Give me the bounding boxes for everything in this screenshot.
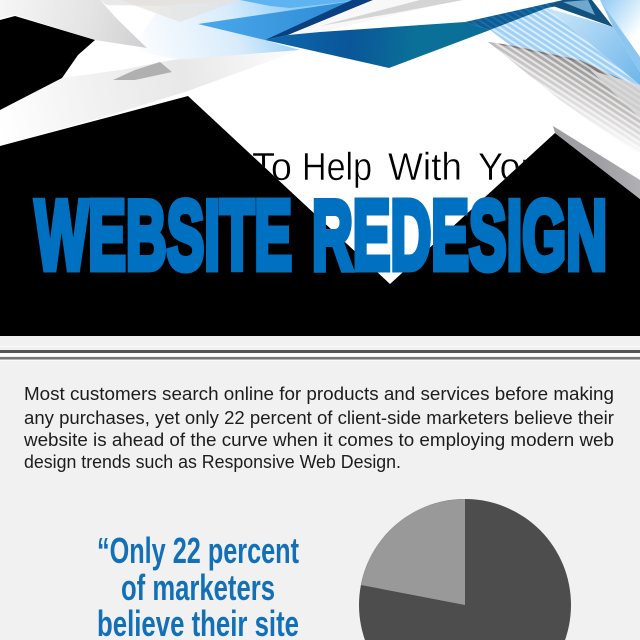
intro paragraph: Most customers search online for products and services before making (24, 383, 614, 404)
gray strip (553, 126, 640, 199)
body panel (0, 336, 640, 640)
black upper field (0, 16, 95, 110)
pale blue triangle (547, 8, 640, 85)
gray leaf (113, 62, 172, 80)
tan ray (120, 0, 240, 22)
dark hatched band (465, 0, 590, 30)
navy band (265, 0, 373, 40)
title word: website: WEBSITE (35, 180, 292, 290)
divider lines (0, 346, 640, 361)
sky gradient band (130, 0, 373, 62)
intro paragraph (23, 383, 614, 472)
black lower field (0, 96, 640, 336)
lower light wing (0, 50, 300, 146)
light blue shard (198, 0, 373, 40)
pie chart (359, 499, 571, 640)
gray hatched shadow (488, 42, 640, 157)
hatch fade (480, 42, 640, 160)
gray top band (100, 0, 240, 6)
pull quote (97, 530, 299, 640)
pull quote: “Only 22 percent (97, 530, 299, 571)
subtitle (252, 152, 526, 188)
dark top triangle (550, 0, 613, 27)
light gray wash (590, 70, 640, 118)
intro paragraph: website is ahead of the curve when it comes to employing modern web (23, 429, 614, 450)
intro paragraph: any purchases, yet only 22 percent of client-side marketers believe their (24, 407, 614, 428)
subtitle: With (388, 146, 462, 189)
header artwork (0, 0, 640, 336)
gray upper-left wing (0, 0, 147, 48)
hatched blue stripes (490, 8, 640, 90)
light slice 22 percent (361, 499, 465, 605)
pull quote: of marketers (121, 567, 275, 608)
subtitle: Your (478, 146, 554, 189)
intro paragraph: design trends such as Responsive Web Design. (24, 451, 401, 472)
small light blue facet (563, 0, 595, 15)
sky corner wedge (600, 0, 640, 57)
subtitle: To (252, 146, 292, 189)
subtitle: Help (302, 146, 372, 189)
white wedge with gray streak (288, 0, 460, 35)
dark slice 78 percent (359, 499, 571, 640)
title (35, 180, 607, 290)
top blue strip (240, 0, 360, 8)
deep blue teal shard (265, 22, 490, 68)
